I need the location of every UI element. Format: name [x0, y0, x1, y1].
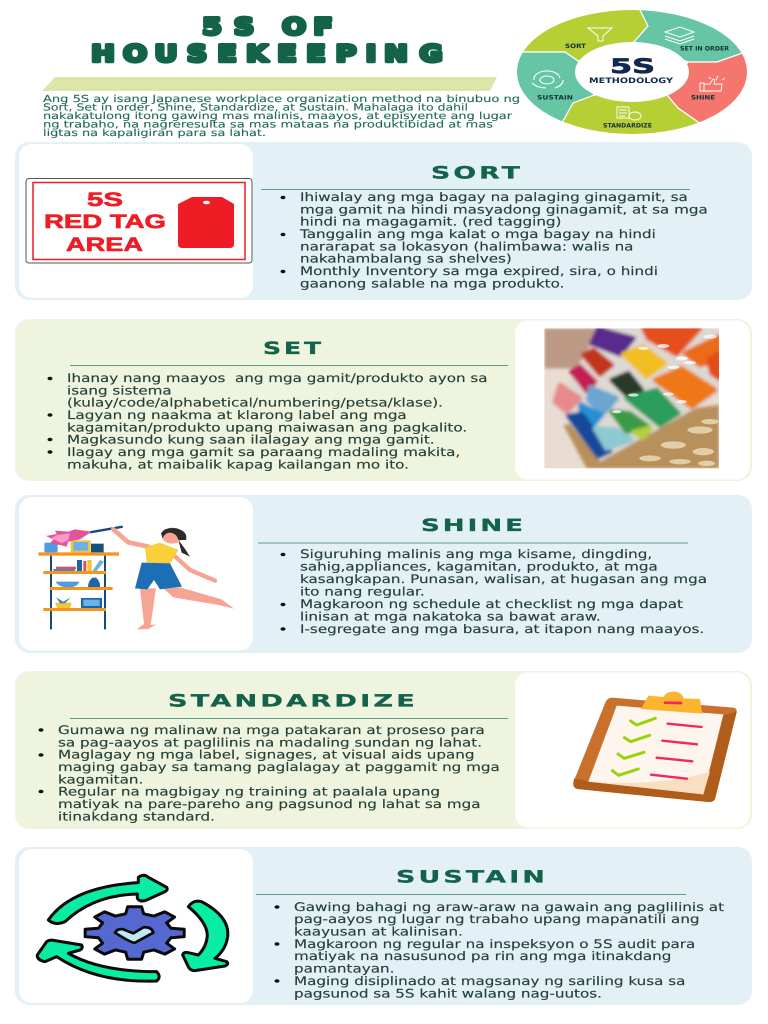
- title: 5SOF: [202, 15, 333, 41]
- sort bullets: [280, 190, 708, 290]
- 5S methodology wheel: [517, 10, 747, 134]
- list lines: [651, 724, 702, 779]
- sustain bullets: Gawing bahagi ng araw-araw na gawain ang paglilinis at: [294, 900, 724, 914]
- panel: shine: [15, 495, 752, 653]
- sustain heading: SUSTAIN: [396, 868, 548, 888]
- standardize bullets: Gumawa ng malinaw na mga patakaran at proseso para: [58, 723, 485, 737]
- icon: cycle gear: [532, 71, 563, 88]
- sustain bullets: Magkaroon ng regular na inspeksyon o 5S audit para: [294, 937, 695, 951]
- set bullets: makuha, at maibalik kapag kailangan mo ito.: [67, 457, 409, 471]
- sort bullets: nararapat sa lokasyon (halimbawa: walis na: [300, 239, 633, 253]
- standardize bullets: Maglagay ng mga label, signages, at visual aids upang: [58, 748, 474, 762]
- shine bullets: linisan at mga nakatoka sa bawat araw.: [300, 610, 601, 624]
- shine bullets: sahig,appliances, kagamitan, produkto, at mga: [300, 560, 658, 574]
- shine bullets: Magkaroon ng schedule at checklist ng mga dapat: [300, 597, 683, 611]
- intro text block: nakakatulong itong gawing mas malinis, maayos, at episyente ang lugar: [43, 111, 512, 122]
- standardize bullets: maging gabay sa tamang paglalagay at paggamit ng mga: [58, 760, 500, 774]
- intro text block: [43, 94, 520, 139]
- intro text block: ng trabaho, na nagreresulta sa mas mataas na produktibidad at mas: [43, 120, 493, 130]
- shine bullets: Siguruhing malinis ang mga kisame, dingding,: [300, 547, 652, 561]
- shine bullets: [280, 547, 707, 636]
- feather duster: [46, 527, 123, 547]
- gear: [85, 907, 184, 959]
- red tag area sign: [26, 178, 252, 263]
- photo: embroidery floss tray: [544, 328, 719, 468]
- set bullets: Ilagay ang mga gamit sa paraang madaling makita,: [67, 445, 460, 459]
- wheel centre label: [589, 54, 674, 85]
- standardize heading: STANDARDIZE: [168, 692, 418, 712]
- sort bullets: Ihiwalay ang mga bagay na palaging ginagamit, sa: [300, 190, 688, 204]
- shelf: [38, 540, 119, 629]
- sustain bullets: [274, 900, 724, 1000]
- set bullets: Lagyan ng naakma at klarong label ang mga: [67, 408, 407, 422]
- shine bullets: I-segregate ang mga basura, at itapon nang maayos.: [300, 622, 704, 636]
- sort bullets: nakahambalang sa shelves): [300, 252, 512, 266]
- icon: gear with cycle arrows: [37, 875, 228, 981]
- sort image card: [19, 144, 253, 298]
- red tag area sign: RED TAG: [44, 211, 166, 233]
- illustration: woman dusting a shelf: [38, 527, 234, 629]
- sort bullets: Monthly Inventory sa mga expired, sira, o hindi: [300, 264, 658, 278]
- set bullets: kagamitan/produkto upang maiwasan ang pagkalito.: [67, 420, 467, 434]
- set bullets: (kulay/code/alphabetical/numbering/petsa/klase).: [67, 396, 443, 410]
- standardize bullets: itinakdang standard.: [58, 809, 215, 823]
- sustain bullets: matiyak na nasusunod pa rin ang mga itinakdang: [294, 949, 671, 963]
- wheel labels: SORT: [565, 43, 587, 50]
- icon: thumbs up with sparkles: [700, 76, 725, 91]
- wheel labels: [537, 43, 729, 130]
- wheel labels: SUSTAIN: [537, 94, 573, 102]
- set bullets: Magkasundo kung saan ilalagay ang mga gamit.: [67, 433, 435, 447]
- title highlight strip: [42, 77, 497, 91]
- intro text block: ligtas na kapaligiran para sa lahat.: [43, 128, 266, 139]
- wheel labels: SHINE: [691, 94, 715, 102]
- red tag area sign: AREA: [66, 234, 143, 256]
- sustain image card: [19, 849, 253, 1003]
- shine bullets: kasangkapan. Punasan, walisan, at hugasan ang mga: [300, 572, 707, 586]
- panel: standardize: [15, 671, 752, 829]
- shine heading: SHINE: [421, 516, 526, 536]
- title: HOUSEKEEPING: [91, 42, 443, 68]
- sort bullets: hindi na magagamit. (red tagging): [300, 215, 561, 229]
- icon: funnel: [588, 28, 612, 41]
- wheel centre label: 5S: [610, 54, 655, 78]
- standardize bullets: sa pag-aayos at paglilinis na madaling sundan ng lahat.: [58, 735, 482, 749]
- illustration: clipboard: [573, 692, 737, 802]
- panel: sort: [15, 142, 752, 300]
- wheel centre label: METHODOLOGY: [589, 76, 674, 85]
- sort bullets: gaanong salable na mga produkto.: [300, 276, 564, 290]
- shine bullets: ito nang regular.: [300, 584, 425, 598]
- woman: [113, 528, 234, 629]
- intro text block: Sort, Set in order, Shine, Standardize, at Sustain. Mahalaga ito dahil: [43, 102, 468, 114]
- sort bullets: Tanggalin ang mga kalat o mga bagay na hindi: [299, 227, 656, 241]
- sort heading: SORT: [431, 163, 523, 183]
- title: [91, 15, 443, 68]
- standardize bullets: [38, 723, 500, 823]
- sustain bullets: pamantayan.: [294, 962, 394, 976]
- sustain bullets: Maging disiplinado at magsanay ng sariling kusa sa: [294, 974, 685, 988]
- sustain bullets: pag-aayos ng lugar ng trabaho upang mapanatili ang: [294, 912, 700, 926]
- intro text block: Ang 5S ay isang Japanese workplace organization method na binubuo ng: [43, 94, 520, 105]
- panel: sustain: [15, 847, 752, 1005]
- standardize bullets: Regular na magbigay ng training at paalala upang: [58, 785, 440, 799]
- sustain bullets: pagsunod sa 5S kahit walang nag-uutos.: [294, 986, 602, 1000]
- sort bullets: mga gamit na hindi masyadong ginagamit, at sa mga: [300, 202, 708, 216]
- set bullets: Ihanay nang maayos ang mga gamit/produkto ayon sa: [67, 371, 488, 385]
- check marks: [612, 718, 655, 775]
- sustain bullets: kaayusan at kalinisan.: [294, 924, 463, 938]
- standardize bullets: kagamitan.: [58, 772, 143, 786]
- panel: set: [15, 319, 752, 481]
- arrows: [37, 875, 228, 981]
- standardize bullets: matiyak na pare-pareho ang pagsunod ng lahat sa mga: [58, 797, 480, 811]
- set image card: [515, 320, 750, 480]
- set bullets: isang sistema: [67, 383, 172, 397]
- icon: checklist: [617, 107, 641, 120]
- red tag area sign: 5S: [87, 189, 123, 211]
- set heading: SET: [263, 339, 324, 359]
- set bullets: [48, 371, 488, 471]
- wheel labels: STANDARDIZE: [603, 122, 652, 130]
- wheel labels: SET IN ORDER: [680, 46, 729, 52]
- icon: layers: [665, 27, 694, 44]
- standardize image card: [515, 672, 750, 828]
- shine image card: [19, 497, 253, 650]
